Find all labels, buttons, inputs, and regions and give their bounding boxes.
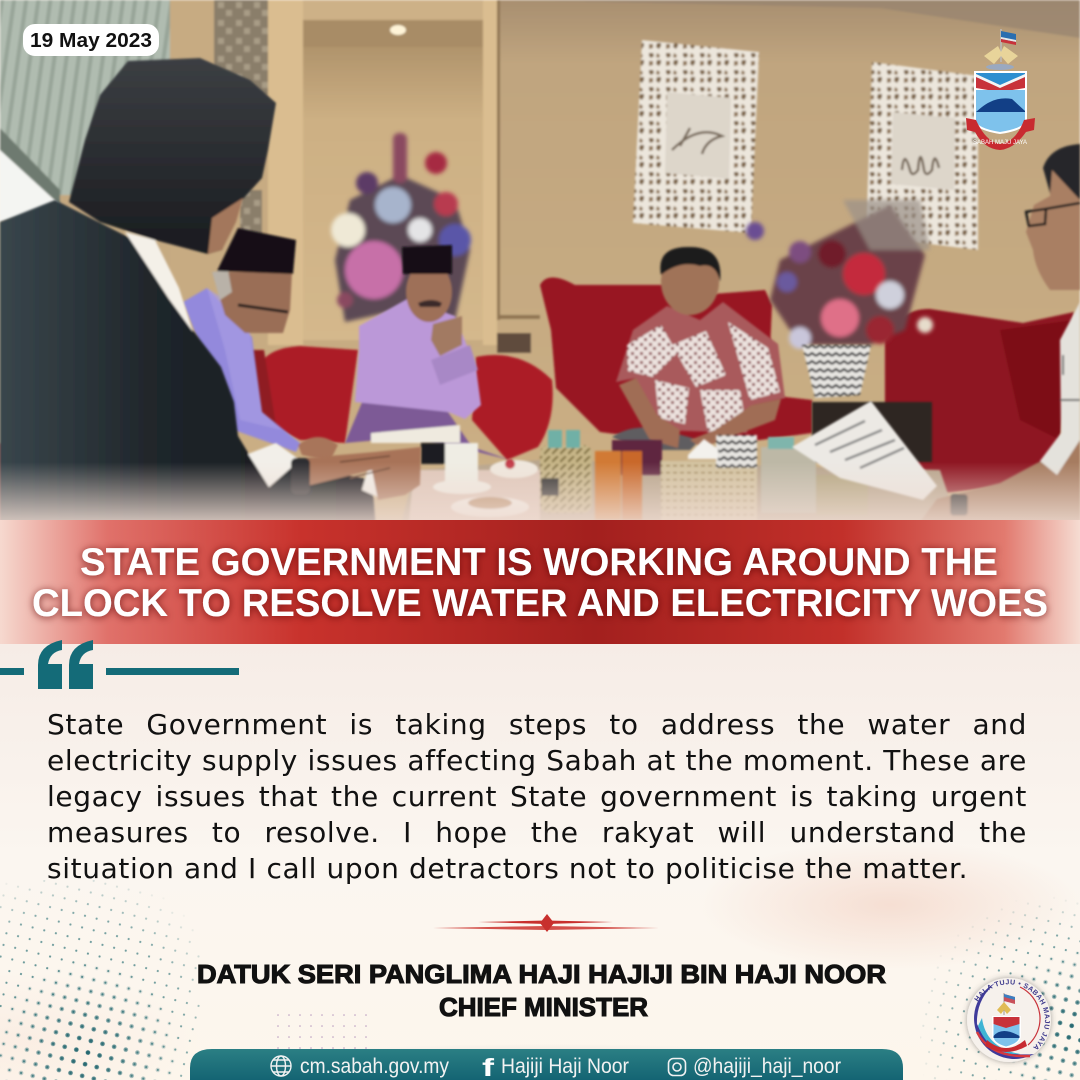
attribution: DATUK SERI PANGLIMA HAJI HAJIJI BIN HAJI NOOR <box>197 959 886 989</box>
photo bottom fade into banner <box>0 462 1080 522</box>
icon: wall calligraphy panel left <box>633 40 759 233</box>
date pill: 19 May 2023 <box>30 30 152 52</box>
instagram handle: @hajiji_haji_noor <box>693 1055 841 1078</box>
decorative halftone dots right <box>920 890 1080 1080</box>
title banner <box>0 520 1080 644</box>
website text: cm.sabah.gov.my <box>300 1055 449 1078</box>
badge: Hala Tuju Sabah Maju Jaya <box>964 974 1054 1066</box>
decorative halftone dots left <box>0 880 200 1080</box>
icon: opening quotation mark <box>38 640 93 689</box>
icon: globe <box>271 1056 291 1076</box>
table with snacks and documents <box>408 428 948 520</box>
person: man in songkok and purple shirt <box>183 228 338 461</box>
quote text: electricity supply issues affecting Sabah at the moment. These are <box>47 744 1027 777</box>
date pill <box>23 24 159 56</box>
documents in hand <box>792 401 937 500</box>
person: man in dark suit, back to camera <box>0 58 421 530</box>
attribution: CHIEF MINISTER <box>439 992 648 1022</box>
icon: Sabah state crest <box>966 29 1035 150</box>
footer bar <box>190 1049 903 1080</box>
facebook handle: Hajiji Haji Noor <box>501 1055 629 1078</box>
icon: Sabah state crest: SABAH MAJU JAYA <box>973 140 1027 146</box>
person: man in patterned batik shirt <box>612 247 785 450</box>
quote text <box>47 708 1027 885</box>
quote text: legacy issues that the current State government is taking urgent <box>47 780 1027 813</box>
divider ornament <box>433 914 659 932</box>
icon: instagram <box>668 1058 686 1076</box>
page background <box>0 640 1080 1080</box>
flower arrangement left <box>331 133 471 322</box>
decorative dot grid centre <box>268 1005 370 1049</box>
attribution <box>197 959 886 1022</box>
quote text: situation and I call upon detractors not to politicise the matter. <box>47 852 968 885</box>
title text: STATE GOVERNMENT IS WORKING AROUND THE <box>80 541 998 584</box>
icon: wall calligraphy panel right <box>866 62 978 250</box>
title text <box>32 541 1048 625</box>
quote text: measures to resolve. I hope the rakyat will understand the <box>47 816 1027 849</box>
footer bar shadow <box>206 1018 886 1080</box>
person: man at right edge with glasses <box>926 142 1080 520</box>
title text: CLOCK TO RESOLVE WATER AND ELECTRICITY WOES <box>32 582 1048 625</box>
quote marks with rule <box>0 640 239 689</box>
badge: Hala Tuju Sabah Maju Jaya: HALA TUJU • SABAH MAJU JAYA <box>974 979 1050 1050</box>
sofas <box>0 278 1074 525</box>
vase and side table <box>802 345 932 462</box>
photo: meeting in the reception room <box>0 0 1080 533</box>
flower arrangement right <box>746 200 933 349</box>
person: chief minister in purple baju <box>345 245 510 460</box>
photo wall and alcove <box>0 0 1080 530</box>
quote text: State Government is taking steps to address the water and <box>47 708 1027 741</box>
